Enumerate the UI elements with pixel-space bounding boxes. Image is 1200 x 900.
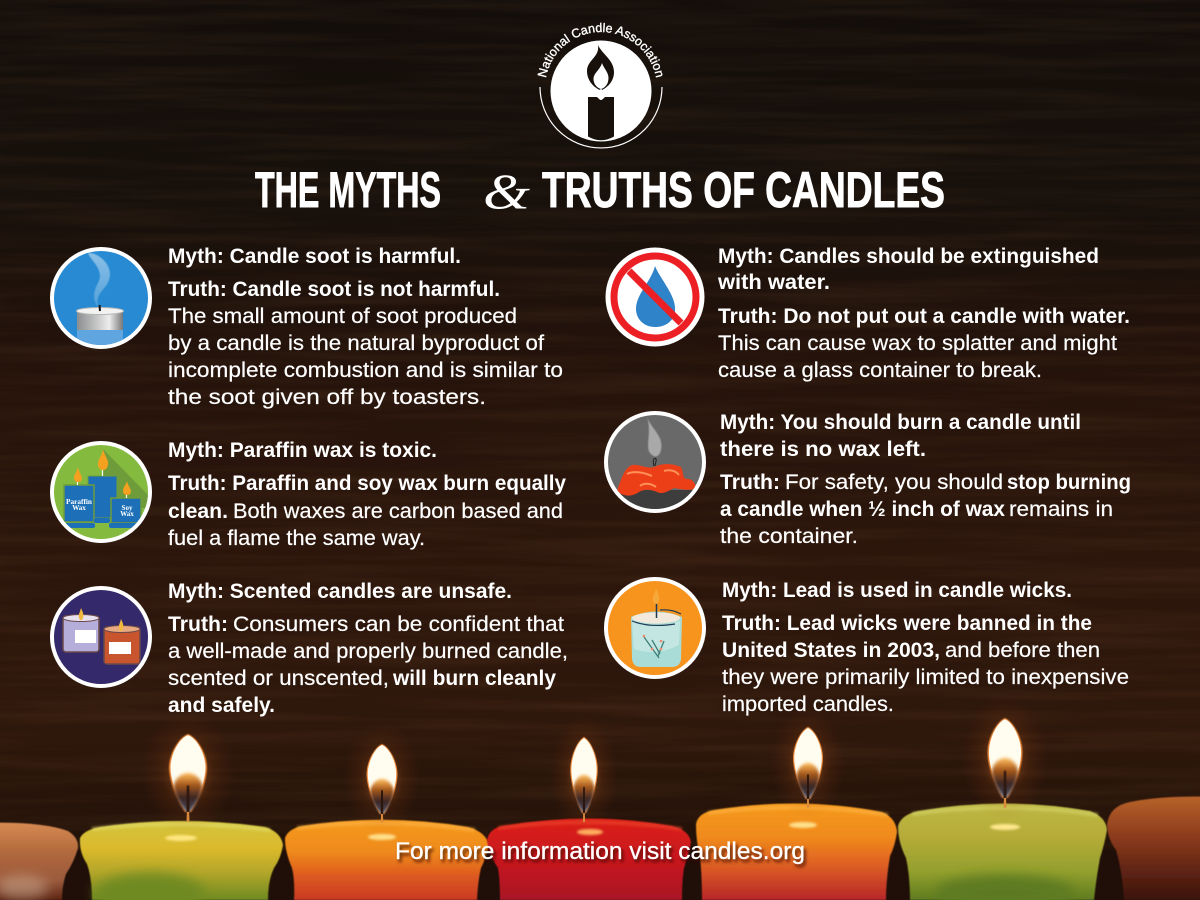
truth text: Truth: — [168, 613, 228, 636]
logo name: National Candle Association — [538, 22, 662, 78]
myth text: with water. — [717, 271, 830, 294]
myth text: there is no wax left. — [720, 438, 926, 461]
panel: burn until no wax myth — [605, 411, 1131, 548]
icon: paraffin and soy candles: Wax — [72, 504, 86, 512]
myth text: Myth: You should burn a candle until — [720, 411, 1081, 434]
truth text: Truth: Lead wicks were banned in the — [722, 612, 1092, 635]
myth text: Myth: Scented candles are unsafe. — [168, 580, 512, 603]
candle 7 — [1107, 797, 1200, 900]
title: & — [483, 163, 530, 219]
panel: candle soot myth — [52, 245, 563, 409]
flame 5 — [962, 694, 1048, 822]
panel: scented candles myth — [52, 580, 568, 717]
truth text: Consumers can be confident that — [233, 613, 564, 636]
candle 5 — [696, 803, 897, 900]
flame 4 — [771, 705, 845, 821]
panel: extinguish with water myth — [606, 245, 1130, 382]
truth text: by a candle is the natural byproduct of — [168, 332, 544, 355]
myth text: Myth: Candles should be extinguished — [718, 245, 1099, 268]
truth text: cause a glass container to break. — [718, 359, 1042, 382]
truth text: will burn cleanly — [392, 667, 556, 690]
truth text: and before then — [945, 639, 1100, 662]
truth text — [722, 612, 1129, 716]
myth text: Myth: Lead is used in candle wicks. — [722, 579, 1072, 602]
truth text: This can cause wax to splatter and might — [718, 332, 1117, 355]
myth text: Myth: Paraffin wax is toxic. — [168, 439, 437, 462]
truth text: the container. — [720, 525, 858, 548]
title: THE MYTHS — [255, 162, 441, 218]
candle 2 — [80, 821, 283, 900]
truth text — [168, 613, 568, 717]
truth text: and safely. — [168, 694, 275, 717]
icon: paraffin and soy candles: Paraffin — [66, 498, 92, 506]
icon: paraffin and soy candles: Soy — [122, 504, 133, 512]
truth text: Truth: Paraffin and soy wax burn equally — [168, 472, 566, 495]
icon: no water sign — [606, 248, 704, 346]
truth text: Both waxes are carbon based and — [233, 500, 563, 523]
truth text: imported candles. — [722, 693, 894, 716]
icon: teal jar candle — [606, 579, 704, 677]
truth text: Truth: — [720, 471, 780, 494]
logo flame — [587, 45, 614, 90]
truth text: Truth: Candle soot is not harmful. — [168, 278, 500, 301]
candle 1 — [0, 823, 78, 900]
flame 2 — [344, 723, 420, 835]
myth text — [717, 245, 1099, 294]
icon: smoking tea light — [52, 249, 150, 347]
truth text: scented or unscented, — [168, 667, 389, 690]
logo: National Candle Association — [538, 22, 663, 148]
logo ring — [540, 87, 662, 148]
truth text: a candle when ½ inch of wax — [720, 498, 1005, 521]
icon: paraffin and soy candles — [52, 443, 150, 541]
truth text: United States in 2003, — [722, 639, 940, 662]
title: TRUTHS OF CANDLES — [542, 162, 945, 218]
truth text: The small amount of soot produced — [168, 305, 517, 328]
myth text — [720, 411, 1081, 461]
candle 6 — [898, 804, 1107, 900]
flame 3 — [550, 714, 618, 836]
title — [255, 162, 945, 219]
truth text: they were primarily limited to inexpensive — [722, 666, 1129, 689]
candle 3 — [285, 820, 489, 900]
panel: lead wicks myth — [606, 579, 1129, 716]
truth text: For safety, you should — [785, 471, 1003, 494]
truth text — [168, 472, 566, 550]
truth text: stop burning — [1007, 471, 1131, 494]
icon: two scented jar candles — [52, 588, 150, 686]
icon: paraffin and soy candles: Wax — [120, 510, 134, 518]
flame 1 — [141, 711, 235, 835]
footer: website call to action: For more information visit candles.org — [395, 838, 805, 865]
logo inner flame — [594, 63, 608, 89]
candle 4 — [487, 818, 691, 900]
candle row photo — [0, 694, 1200, 900]
truth text: fuel a flame the same way. — [168, 527, 425, 550]
truth text: a well-made and properly burned candle, — [168, 640, 568, 663]
truth text — [168, 278, 563, 409]
logo candle — [588, 97, 614, 140]
truth text: remains in — [1009, 498, 1113, 521]
icon: melted candle with smoke — [605, 413, 705, 512]
panel: paraffin wax myth — [52, 439, 566, 550]
truth text — [718, 305, 1130, 382]
truth text: the soot given off by toasters. — [168, 386, 486, 409]
truth text: clean. — [168, 500, 228, 523]
truth text — [720, 471, 1131, 548]
myth text: Myth: Candle soot is harmful. — [168, 245, 461, 268]
truth text: Truth: Do not put out a candle with water. — [718, 305, 1130, 328]
truth text: incomplete combustion and is similar to — [168, 359, 563, 382]
